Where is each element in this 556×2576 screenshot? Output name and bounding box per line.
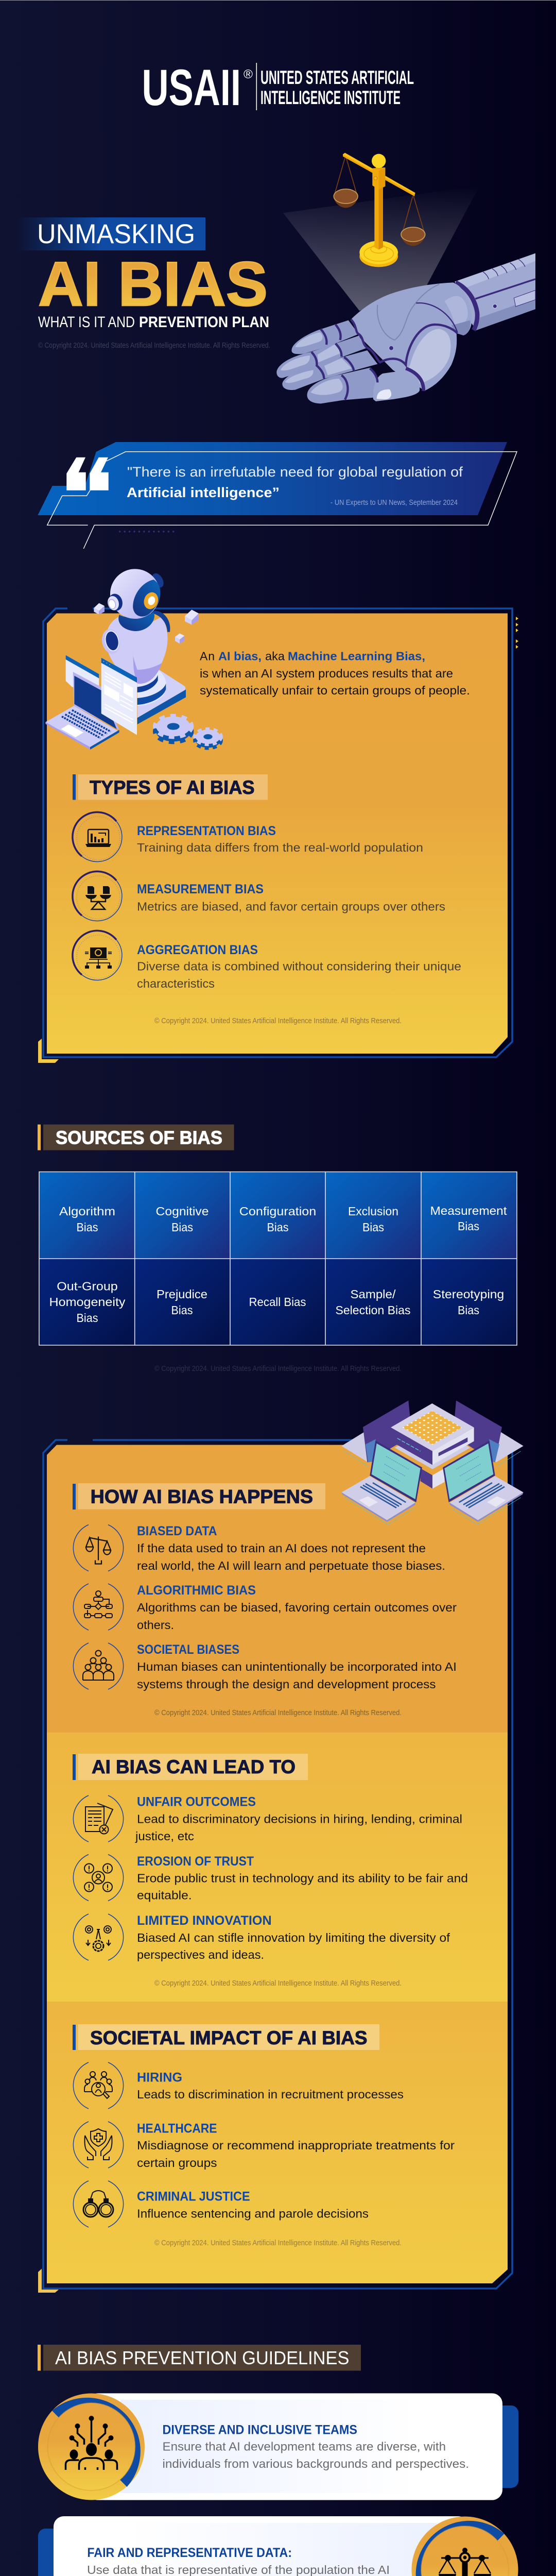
icon: floating cubes (94, 603, 199, 643)
copyright: © Copyright 2024. United States Artificial Intelligence Institute. All Rights Reserved. (154, 1017, 402, 1025)
item: erosion of trust (73, 1854, 468, 1902)
copyright: © Copyright 2024. United States Artificial Intelligence Institute. All Rights Reserved. (154, 1979, 402, 1988)
item: algorithmic bias: Algorithms can be biased, favoring certain outcomes over (137, 1601, 457, 1614)
heading: how AI bias happens: HOW AI BIAS HAPPENS (91, 1486, 313, 1507)
card: fair and representative data (38, 2516, 518, 2576)
illustration: robot with laptop (45, 569, 221, 750)
copyright: © Copyright 2024. United States Artificial Intelligence Institute. All Rights Reserved. (154, 2239, 402, 2247)
item: limited innovation: LIMITED INNOVATION (137, 1913, 272, 1928)
logo: USAII: ® (244, 67, 253, 81)
item: algorithmic bias (73, 1583, 457, 1632)
table: sources of bias: Selection Bias (336, 1303, 411, 1317)
icon: gears and arrows (73, 1914, 124, 1960)
table: sources of bias: Cognitive (155, 1205, 209, 1218)
heading: societal impact of AI bias: SOCIETAL IMPACT OF AI BIAS (90, 2027, 368, 2048)
table: sources of bias: Bias (76, 1221, 98, 1234)
right laptop (443, 1440, 524, 1524)
item: healthcare: HEALTHCARE (137, 2121, 217, 2136)
item: criminal justice: Influence sentencing and parole decisions (137, 2207, 369, 2221)
table: sources of bias: Bias (171, 1221, 193, 1234)
item: healthcare: certain groups (137, 2156, 217, 2170)
heading: types of AI bias: TYPES OF AI BIAS (90, 777, 254, 798)
logo: USAII: USAII (142, 59, 241, 116)
item: aggregation bias: AGGREGATION BIAS (137, 943, 258, 957)
icon: computer network (73, 930, 122, 980)
icon: quotation marks (66, 457, 109, 490)
card: diverse and inclusive teams: DIVERSE AND INCLUSIVE TEAMS (163, 2422, 357, 2437)
card: diverse and inclusive teams: individuals from various backgrounds and perspectives. (163, 2457, 469, 2470)
item: biased data (73, 1524, 445, 1572)
table: sources of bias: Bias (171, 1303, 193, 1317)
heading: how AI bias happens (73, 1483, 325, 1510)
title block: WHAT IS IT AND (38, 314, 135, 331)
icon: gears (155, 716, 221, 749)
item: criminal justice (73, 2181, 369, 2227)
item: hiring (73, 2062, 404, 2109)
copyright: © Copyright 2024. United States Artificial Intelligence Institute. All Rights Reserved. (154, 1709, 402, 1717)
item: algorithmic bias: others. (137, 1618, 174, 1632)
quote banner (38, 442, 517, 549)
table: sources of bias: Homogeneity (49, 1295, 126, 1309)
table: sources of bias: Sample/ (350, 1287, 396, 1301)
item: unfair outcomes (73, 1795, 462, 1843)
intro text (200, 649, 470, 697)
icon: person with warnings (73, 1855, 124, 1901)
item: healthcare: Misdiagnose or recommend inappropriate treatments for (137, 2139, 455, 2152)
icon: team circuit badge (38, 2394, 145, 2500)
heading: AI bias can lead to: AI BIAS CAN LEAD TO (92, 1756, 296, 1777)
item: representation bias: Training data differs from the real-world population (137, 841, 423, 854)
icon: group and magnifier (73, 2062, 124, 2109)
item: algorithmic bias: ALGORITHMIC BIAS (137, 1583, 256, 1598)
icon: handcuffs (73, 2181, 124, 2227)
table: sources of bias: Recall Bias (249, 1295, 306, 1309)
item: erosion of trust: EROSION OF TRUST (137, 1854, 254, 1869)
intro text: AI bias, (218, 649, 262, 663)
item: erosion of trust: Erode public trust in technology and its ability to be fair and (137, 1871, 468, 1885)
logo: USAII: INTELLIGENCE INSTITUTE (260, 87, 401, 108)
item: societal biases (73, 1642, 457, 1691)
palm (351, 282, 472, 391)
icon: laptop chart (73, 812, 122, 861)
quote text: Artificial intelligence” (127, 485, 280, 500)
table: sources of bias (39, 1172, 517, 1345)
table: sources of bias: Configuration (239, 1205, 316, 1218)
item: limited innovation (73, 1913, 450, 1961)
item: biased data: If the data used to train an AI does not represent the (137, 1541, 426, 1555)
table: sources of bias: Stereotyping (433, 1287, 504, 1301)
item: hiring: Leads to discrimination in recruitment processes (137, 2088, 404, 2101)
item: societal biases: SOCIETAL BIASES (137, 1642, 239, 1657)
item: aggregation bias (73, 930, 461, 990)
icon: people pyramid (73, 1643, 124, 1689)
icon: document with x (73, 1795, 124, 1842)
item: societal biases: Human biases can unintentionally be incorporated into AI (137, 1660, 457, 1673)
quote text (127, 464, 463, 507)
icon: scales (73, 1525, 124, 1571)
icon: flowchart (73, 1584, 124, 1630)
intro text: aka (265, 649, 285, 663)
table: sources of bias: Bias (458, 1303, 479, 1317)
item: criminal justice: CRIMINAL JUSTICE (137, 2189, 250, 2204)
title block: PREVENTION PLAN (139, 314, 269, 331)
item: biased data: BIASED DATA (137, 1524, 217, 1538)
table: sources of bias: Bias (267, 1221, 288, 1234)
quote text: - UN Experts to UN News, September 2024 (331, 499, 458, 507)
item: measurement bias (73, 871, 445, 921)
item: measurement bias: Metrics are biased, and favor certain groups over others (137, 900, 445, 913)
item: limited innovation: Biased AI can stifle innovation by limiting the diversity of (137, 1931, 450, 1944)
table: sources of bias: Bias (76, 1311, 98, 1325)
item: erosion of trust: equitable. (137, 1889, 192, 1902)
item: measurement bias: MEASUREMENT BIAS (137, 882, 264, 896)
icon: hands and shield (73, 2122, 124, 2168)
item: societal biases: systems through the design and development process (137, 1677, 436, 1691)
illustration: server and laptops (341, 1400, 524, 1524)
icon: scales badge (412, 2516, 518, 2576)
card: diverse and inclusive teams (38, 2393, 518, 2500)
copyright: © Copyright 2024. United States Artificial Intelligence Institute. All Rights Reserved. (154, 1365, 402, 1373)
fingers (291, 320, 359, 354)
item: aggregation bias: characteristics (137, 977, 215, 990)
panel: what is AI bias and types (38, 569, 518, 1063)
table: sources of bias: Prejudice (157, 1287, 207, 1301)
item: unfair outcomes: justice, etc (135, 1829, 194, 1843)
table: sources of bias: Measurement (430, 1204, 507, 1217)
table: sources of bias: Bias (362, 1221, 384, 1234)
illustration: robot hand holding scale (276, 153, 535, 403)
intro text: is when an AI system produces results that are (200, 667, 453, 680)
item: representation bias (73, 812, 423, 861)
card: diverse and inclusive teams: Ensure that AI development teams are diverse, with (163, 2440, 446, 2453)
heading: AI bias prevention guidelines: AI BIAS PREVENTION GUIDELINES (55, 2347, 349, 2368)
item: representation bias: REPRESENTATION BIAS (137, 824, 276, 838)
intro text: systematically unfair to certain groups of people. (200, 684, 470, 697)
title block: AI BIAS (38, 249, 268, 319)
left laptop (341, 1440, 422, 1524)
table: sources of bias: Bias (458, 1219, 479, 1233)
card: fair and representative data: FAIR AND REPRESENTATIVE DATA: (87, 2546, 292, 2560)
title block: © Copyright 2024. United States Artificial Intelligence Institute. All Rights Reserved. (38, 342, 270, 350)
item: unfair outcomes: UNFAIR OUTCOMES (137, 1795, 256, 1809)
icon: balance with documents (73, 871, 122, 921)
logo: USAII: UNITED STATES ARTIFICIAL (260, 67, 414, 88)
table: sources of bias: Out-Group (57, 1280, 118, 1293)
table: sources of bias: Algorithm (59, 1205, 115, 1218)
table: sources of bias: Exclusion (348, 1205, 398, 1218)
logo: USAII (142, 59, 414, 116)
item: hiring: HIRING (137, 2071, 182, 2085)
heading: sources of bias: SOURCES OF BIAS (56, 1127, 222, 1148)
item: limited innovation: perspectives and ideas. (137, 1948, 264, 1961)
item: biased data: real world, the AI will learn and perpetuate those biases. (137, 1559, 445, 1572)
panel: how AI bias happens, consequences, societal impact (38, 1400, 524, 2293)
item: unfair outcomes: Lead to discriminatory decisions in hiring, lending, criminal (137, 1812, 462, 1826)
item: aggregation bias: Diverse data is combined without considering their unique (137, 959, 461, 973)
intro text: An (200, 649, 215, 663)
title block: UNMASKING (37, 219, 195, 249)
title block (15, 217, 270, 350)
icon: scale of justice (334, 153, 425, 267)
item: healthcare (73, 2121, 455, 2170)
intro text: Machine Learning Bias, (288, 649, 425, 663)
quote text: "There is an irrefutable need for global regulation of (127, 464, 463, 480)
